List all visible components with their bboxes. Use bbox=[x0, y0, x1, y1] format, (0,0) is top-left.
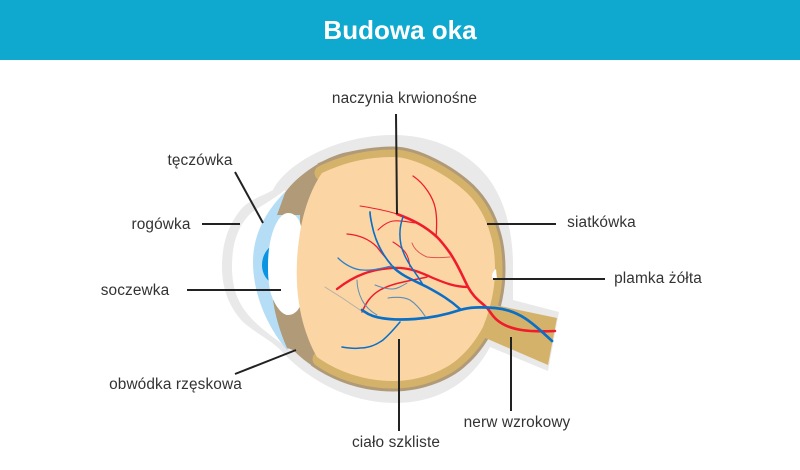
label: obwódka rzęskowa bbox=[109, 350, 296, 393]
iris bbox=[262, 247, 270, 282]
label: soczewka: soczewka bbox=[101, 282, 170, 299]
ciliary body bbox=[273, 147, 393, 391]
label: ciało szkliste: ciało szkliste bbox=[352, 434, 440, 451]
red blood vessels bbox=[337, 176, 555, 331]
sclera outer grey outline bbox=[222, 135, 559, 403]
optic nerve bbox=[475, 305, 557, 365]
label: nerw wzrokowy: nerw wzrokowy bbox=[464, 414, 571, 431]
title: Budowa oka bbox=[323, 15, 477, 45]
label: siatkówka: siatkówka bbox=[567, 214, 636, 231]
label: tęczówka bbox=[167, 152, 263, 223]
choroid arc bbox=[317, 157, 495, 381]
label: ciało szkliste bbox=[352, 339, 440, 451]
cornea bbox=[253, 192, 300, 350]
vitreous body bbox=[297, 157, 495, 381]
retina bbox=[320, 157, 495, 381]
title banner bbox=[0, 0, 800, 60]
label: obwódka rzęskowa: obwódka rzęskowa bbox=[109, 376, 242, 393]
label: plamka żółta: plamka żółta bbox=[614, 270, 702, 287]
eye diagram bbox=[222, 135, 559, 403]
label: naczynia krwionośne: naczynia krwionośne bbox=[332, 90, 477, 107]
blue blood vessels bbox=[325, 212, 552, 348]
label: tęczówka: tęczówka bbox=[167, 152, 233, 169]
lens bbox=[268, 213, 302, 315]
fovea spot bbox=[492, 269, 497, 279]
label: rogówka: rogówka bbox=[131, 216, 191, 233]
label: rogówka bbox=[131, 216, 240, 233]
label: nerw wzrokowy bbox=[464, 337, 571, 431]
